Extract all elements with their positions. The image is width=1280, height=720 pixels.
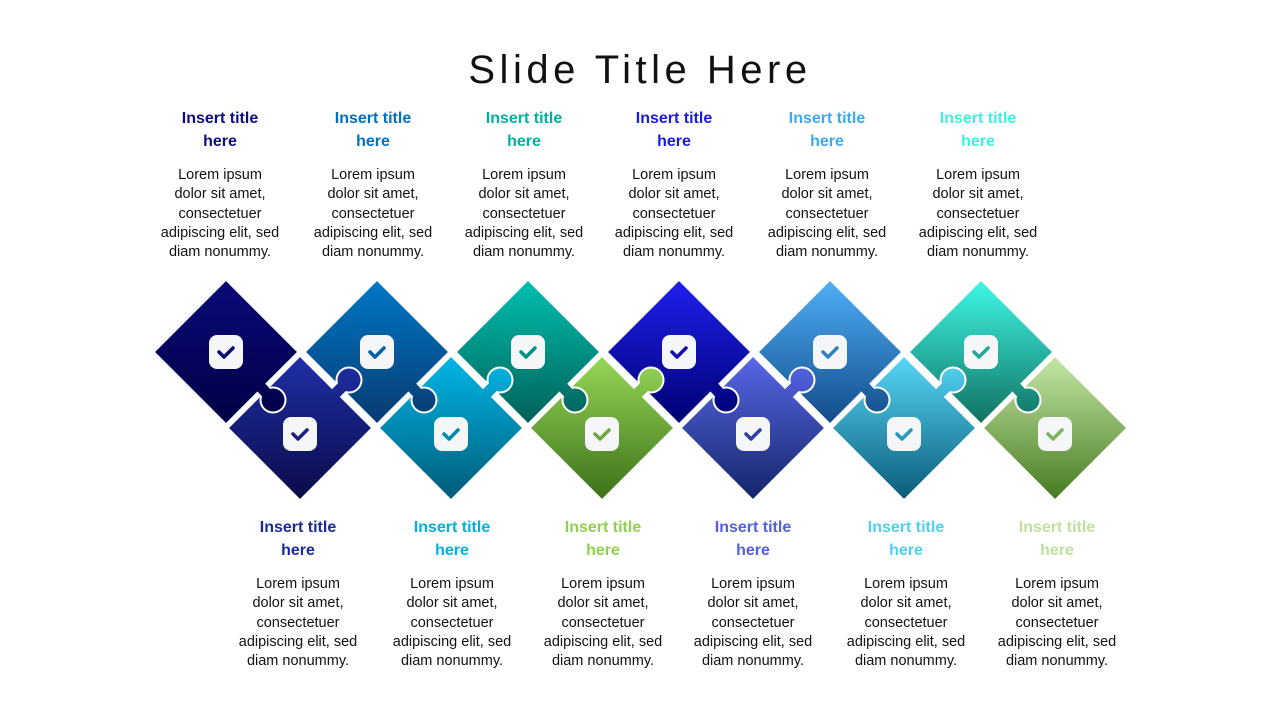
piece: top 1 — [153, 279, 299, 425]
piece: bottom 5 — [831, 355, 977, 501]
text: top 2: Insert title — [335, 110, 411, 127]
text: bottom 1: Lorem ipsum — [256, 576, 340, 592]
text: top 3: consectetuer — [482, 206, 566, 222]
text: bottom 5: consectetuer — [864, 615, 948, 631]
text: bottom 2: Lorem ipsum — [410, 576, 494, 592]
text: bottom 2: here — [435, 542, 469, 559]
text: bottom 3: adipiscing elit, sed — [544, 634, 662, 650]
piece: top 3 — [455, 279, 601, 425]
text: bottom 3: dolor sit amet, — [557, 595, 649, 611]
piece: bottom 3 — [529, 355, 675, 501]
text: top 1: here — [203, 133, 237, 150]
text: top 4: Insert title — [636, 110, 712, 127]
text: bottom 4: adipiscing elit, sed — [694, 634, 812, 650]
title: Slide Title Here — [468, 48, 812, 92]
piece: top 6 — [908, 279, 1054, 425]
text: bottom 3 — [544, 519, 662, 669]
text: bottom 1: adipiscing elit, sed — [239, 634, 357, 650]
text: top 5 — [768, 110, 886, 260]
text: bottom 6: adipiscing elit, sed — [998, 634, 1116, 650]
text: top 1: adipiscing elit, sed — [161, 225, 279, 241]
text: top 1: Insert title — [182, 110, 258, 127]
text: top 4: Lorem ipsum — [632, 167, 716, 183]
text: bottom 5: adipiscing elit, sed — [847, 634, 965, 650]
text: top 5: diam nonummy. — [776, 244, 878, 260]
text: bottom 5: Insert title — [868, 519, 944, 536]
text: bottom 6: consectetuer — [1015, 615, 1099, 631]
text: bottom 2: Insert title — [414, 519, 490, 536]
text: top 4: consectetuer — [632, 206, 716, 222]
text: bottom 4: diam nonummy. — [702, 653, 804, 669]
text: top 3: diam nonummy. — [473, 244, 575, 260]
check icons — [209, 335, 1072, 451]
text: top 4: here — [657, 133, 691, 150]
text: bottom 5: Lorem ipsum — [864, 576, 948, 592]
text: bottom 6: diam nonummy. — [1006, 653, 1108, 669]
piece: bottom 6 — [982, 355, 1128, 501]
text: top 3: dolor sit amet, — [478, 186, 570, 202]
text: top 5: Lorem ipsum — [785, 167, 869, 183]
text: top 6: Insert title — [940, 110, 1016, 127]
piece: top 4 — [606, 279, 752, 425]
text: bottom 4: Insert title — [715, 519, 791, 536]
text: top 4: dolor sit amet, — [628, 186, 720, 202]
text: top 1: dolor sit amet, — [174, 186, 266, 202]
text: top 1 — [161, 110, 279, 260]
text: top 1: consectetuer — [178, 206, 262, 222]
text: bottom 5: diam nonummy. — [855, 653, 957, 669]
text: top 5: here — [810, 133, 844, 150]
text: top 6: consectetuer — [936, 206, 1020, 222]
text: top 2: here — [356, 133, 390, 150]
text: top 4: diam nonummy. — [623, 244, 725, 260]
piece: bottom 1 — [227, 355, 373, 501]
text: top 6: dolor sit amet, — [932, 186, 1024, 202]
text: top 4 — [615, 110, 733, 260]
text: bottom 1: consectetuer — [256, 615, 340, 631]
piece: top 2 — [304, 279, 450, 425]
text: bottom 2: dolor sit amet, — [406, 595, 498, 611]
text: bottom 1: diam nonummy. — [247, 653, 349, 669]
text: bottom 4: dolor sit amet, — [707, 595, 799, 611]
text: top 2: diam nonummy. — [322, 244, 424, 260]
text: top 1: diam nonummy. — [169, 244, 271, 260]
text: bottom 6 — [998, 519, 1116, 669]
text: top 5: dolor sit amet, — [781, 186, 873, 202]
text: bottom 5 — [847, 519, 965, 669]
text: bottom 4: Lorem ipsum — [711, 576, 795, 592]
text: bottom 6: dolor sit amet, — [1011, 595, 1103, 611]
text: bottom 6: Lorem ipsum — [1015, 576, 1099, 592]
text: top 6: Lorem ipsum — [936, 167, 1020, 183]
text: bottom 3: here — [586, 542, 620, 559]
text: top 5: Insert title — [789, 110, 865, 127]
text: top 3: adipiscing elit, sed — [465, 225, 583, 241]
text: bottom 3: Lorem ipsum — [561, 576, 645, 592]
piece: bottom 2 — [378, 355, 524, 501]
text: bottom 2: consectetuer — [410, 615, 494, 631]
text: top 3: here — [507, 133, 541, 150]
text: bottom 3: diam nonummy. — [552, 653, 654, 669]
text: bottom 6: Insert title — [1019, 519, 1095, 536]
text: bottom 4 — [694, 519, 812, 669]
text: bottom 1: Insert title — [260, 519, 336, 536]
text: top 2: adipiscing elit, sed — [314, 225, 432, 241]
text: bottom 1: here — [281, 542, 315, 559]
text: top 2: Lorem ipsum — [331, 167, 415, 183]
text: top 4: adipiscing elit, sed — [615, 225, 733, 241]
text: top 6: adipiscing elit, sed — [919, 225, 1037, 241]
text: top 5: consectetuer — [785, 206, 869, 222]
text: top 5: adipiscing elit, sed — [768, 225, 886, 241]
text: top 6: diam nonummy. — [927, 244, 1029, 260]
text: top 3 — [465, 110, 583, 260]
text: bottom 3: consectetuer — [561, 615, 645, 631]
text: bottom 6: here — [1040, 542, 1074, 559]
text: bottom 5: dolor sit amet, — [860, 595, 952, 611]
text: top 3: Lorem ipsum — [482, 167, 566, 183]
text: bottom 5: here — [889, 542, 923, 559]
text: bottom 1 — [239, 519, 357, 669]
piece: bottom 4 — [680, 355, 826, 501]
text: bottom 4: consectetuer — [711, 615, 795, 631]
text: top 3: Insert title — [486, 110, 562, 127]
knobs — [257, 366, 1042, 414]
text: bottom 2: adipiscing elit, sed — [393, 634, 511, 650]
text: bottom 2: diam nonummy. — [401, 653, 503, 669]
text: bottom 2 — [393, 519, 511, 669]
text: top 6 — [919, 110, 1037, 260]
text: top 2: consectetuer — [331, 206, 415, 222]
text: top 2 — [314, 110, 432, 260]
text: bottom 3: Insert title — [565, 519, 641, 536]
text: top 1: Lorem ipsum — [178, 167, 262, 183]
text: bottom 1: dolor sit amet, — [252, 595, 344, 611]
text: bottom 4: here — [736, 542, 770, 559]
piece: top 5 — [757, 279, 903, 425]
text: top 6: here — [961, 133, 995, 150]
text: top 2: dolor sit amet, — [327, 186, 419, 202]
